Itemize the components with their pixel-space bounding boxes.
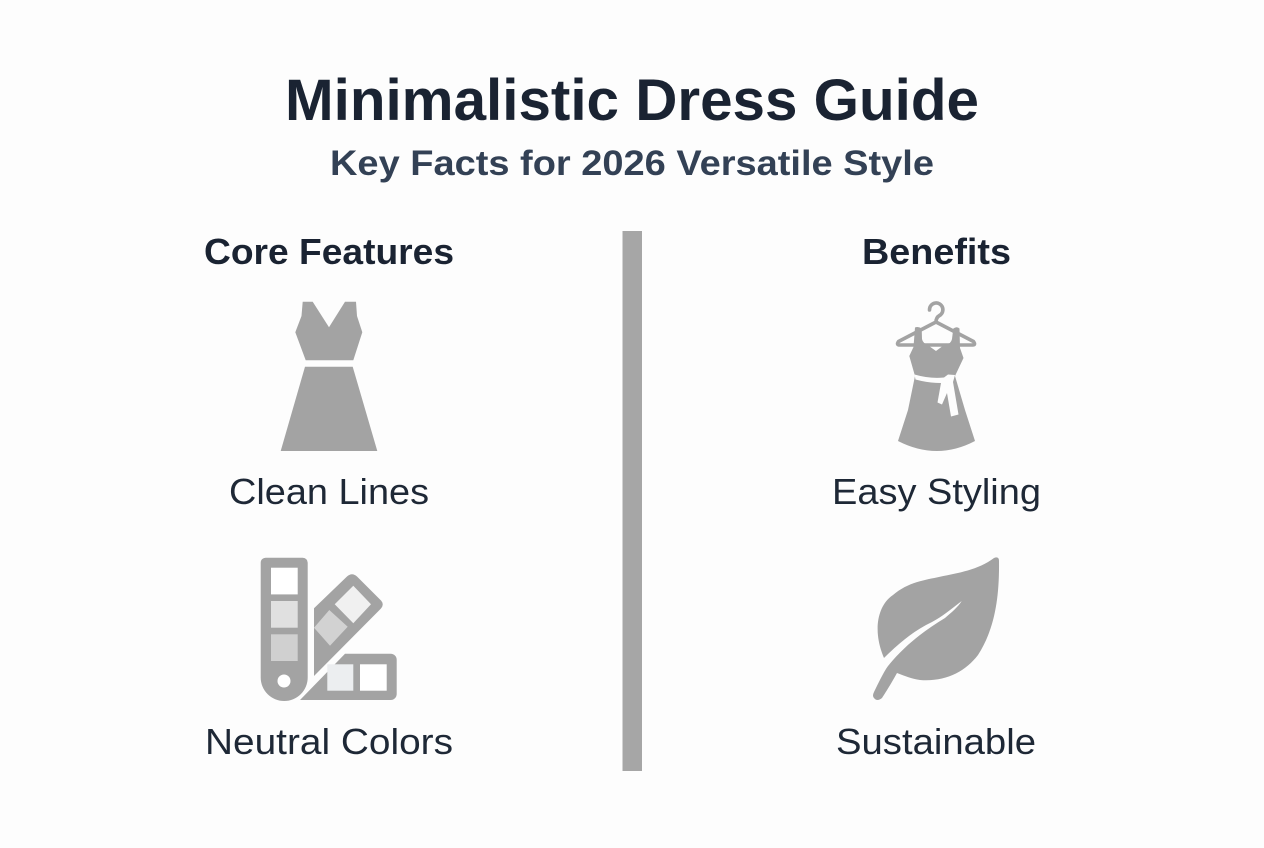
title: Minimalistic Dress Guide <box>285 68 979 133</box>
label: easy styling: Easy Styling <box>832 471 1041 512</box>
icon: leaf <box>873 557 999 700</box>
label: neutral colors: Neutral Colors <box>205 721 453 762</box>
heading: core features: Core Features <box>204 231 454 272</box>
subtitle: Key Facts for 2026 Versatile Style <box>330 144 934 183</box>
label: sustainable: Sustainable <box>836 721 1036 762</box>
heading: benefits: Benefits <box>862 231 1011 272</box>
icon: colour swatches <box>261 558 397 701</box>
icon: dress <box>281 302 377 451</box>
belt and tails <box>914 374 958 416</box>
neckline notch <box>930 347 942 351</box>
center divider <box>622 231 642 771</box>
icon: dress on hanger <box>898 303 975 451</box>
panel: benefits <box>832 231 1041 762</box>
panel: core features <box>204 231 454 762</box>
label: clean lines: Clean Lines <box>229 471 429 512</box>
